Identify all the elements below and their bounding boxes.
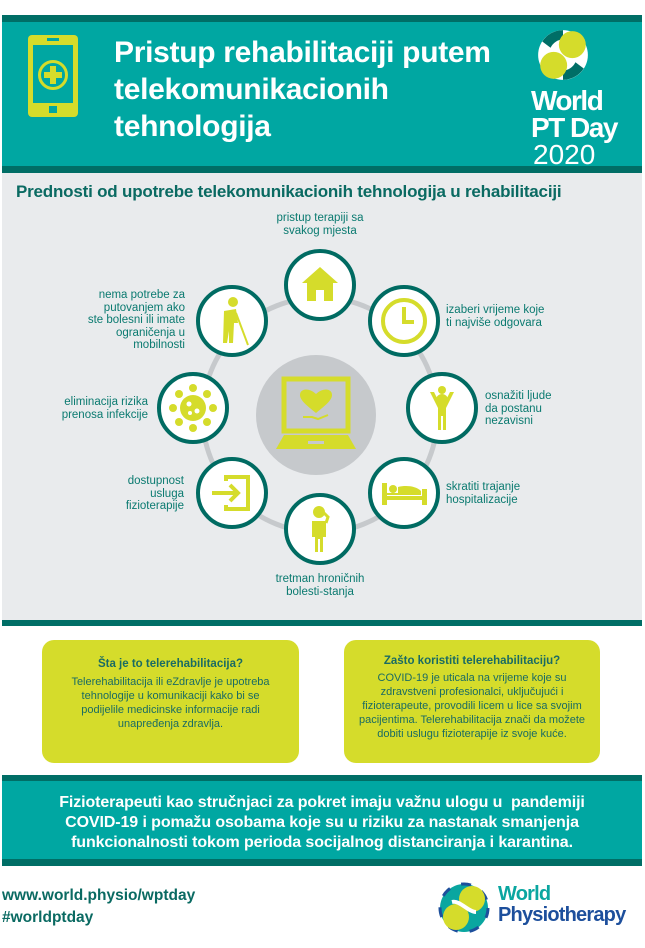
panel heading: Prednosti od upotrebe telekomunikacionih tehnologija u rehabilitaciji [16, 182, 561, 201]
label: elderly: ste bolesni ili imate [88, 314, 185, 326]
title: telekomunikacionih [114, 73, 389, 106]
box: what is telerehabilitation: Šta je to telerehabilitacija? [98, 658, 243, 670]
label: clock: ti najviše odgovara [446, 316, 542, 328]
benefits panel [2, 173, 642, 626]
title: Pristup rehabilitaciji putem [114, 36, 491, 69]
title: tehnologija [114, 110, 271, 143]
logo: World PT Day 2020: 2020 [533, 139, 595, 170]
label: virus: prenosa infekcije [62, 408, 148, 420]
item: parent child [406, 372, 478, 444]
label: bed: skratiti trajanje [446, 481, 520, 493]
ring [200, 295, 440, 535]
bottom message band: COVID-19 i pomažu osobama koje su u riziku za nastanak smanjenja [65, 814, 579, 831]
label: arrow [126, 475, 184, 512]
label: virus: eliminacija rizika [64, 396, 148, 408]
logo: World PT Day 2020: World [531, 85, 602, 116]
label: elderly [88, 289, 186, 351]
box: why use telerehabilitation: Zašto koristiti telerehabilitaciju? [384, 655, 560, 667]
label: arrow: dostupnost [128, 475, 184, 487]
box: why use telerehabilitation: COVID-19 je uticala na vrijeme koje su [378, 672, 566, 684]
item: clock [368, 285, 440, 357]
item: virus [157, 372, 229, 444]
logo: World Physiotherapy [438, 882, 626, 933]
label: chronic: tretman hroničnih [276, 573, 364, 585]
footer links: www.world.physio/wptday [2, 887, 195, 904]
box: why use telerehabilitation: dobiti uslugu fizioterapije iz svoje kuće. [377, 728, 567, 740]
box: what is telerehabilitation [42, 640, 299, 763]
item: arrow in [196, 457, 268, 529]
logo: World PT Day 2020 [531, 30, 618, 170]
label: clock: izaberi vrijeme koje [446, 304, 544, 316]
label: parent child: nezavisni [485, 415, 533, 427]
label: chronic [276, 573, 364, 598]
logo: World Physiotherapy: Physiotherapy [498, 904, 625, 926]
bottom message band: Fizioterapeuti kao stručnjaci za pokret imaju važnu ulogu u pandemiji [59, 794, 585, 811]
label: elderly: putovanjem ako [104, 302, 185, 314]
box: why use telerehabilitation: zdravstveni profesionalci, uključujući i [381, 686, 563, 698]
label: chronic: bolesti-stanja [286, 586, 354, 598]
label: clock [446, 304, 544, 328]
box: why use telerehabilitation [344, 640, 600, 763]
label: elderly: nema potrebe za [99, 289, 185, 301]
item: chronic illness person [284, 493, 356, 565]
label: parent child [485, 390, 551, 427]
label: virus [62, 396, 148, 420]
ring diagram [62, 212, 551, 598]
label: home [277, 212, 364, 236]
label: arrow: fizioterapije [126, 500, 184, 512]
bottom message band: funkcionalnosti tokom perioda socijalnog distanciranja i karantina. [71, 834, 573, 851]
logo: World Physiotherapy: World [498, 883, 550, 905]
box: what is telerehabilitation: Telerehabilitacija ili eZdravlje je upotreba tehnologije u komunikaciji kako bi se podijelile medicinske informacije radi unapređenja zdravlja. [71, 676, 270, 730]
label: bed [446, 481, 520, 506]
item: home [284, 249, 356, 321]
footer links [2, 887, 196, 926]
center laptop [256, 355, 376, 475]
item: bed [368, 457, 440, 529]
label: parent child: da postanu [485, 402, 542, 414]
icon: phone [28, 35, 78, 117]
label: arrow: usluga [150, 488, 184, 500]
label: home: pristup terapiji sa [277, 212, 363, 224]
header band [2, 15, 642, 173]
title [114, 36, 491, 143]
label: bed: hospitalizacije [446, 494, 518, 506]
footer links: #worldptday [2, 909, 93, 926]
box: why use telerehabilitation: fizioterapeute, provodili licem u lice sa svojim [362, 700, 582, 712]
item: elderly with cane [196, 285, 268, 357]
box: why use telerehabilitation: pacijentima. Telerehabilitacija znači da možete [359, 714, 585, 726]
label: parent child: osnažiti ljude [485, 390, 551, 402]
bottom message band [2, 775, 642, 866]
label: elderly: ograničenja u [116, 326, 185, 338]
logo: World PT Day 2020: PT Day [531, 112, 617, 143]
label: home: svakog mjesta [283, 224, 357, 236]
label: elderly: mobilnosti [133, 339, 185, 351]
